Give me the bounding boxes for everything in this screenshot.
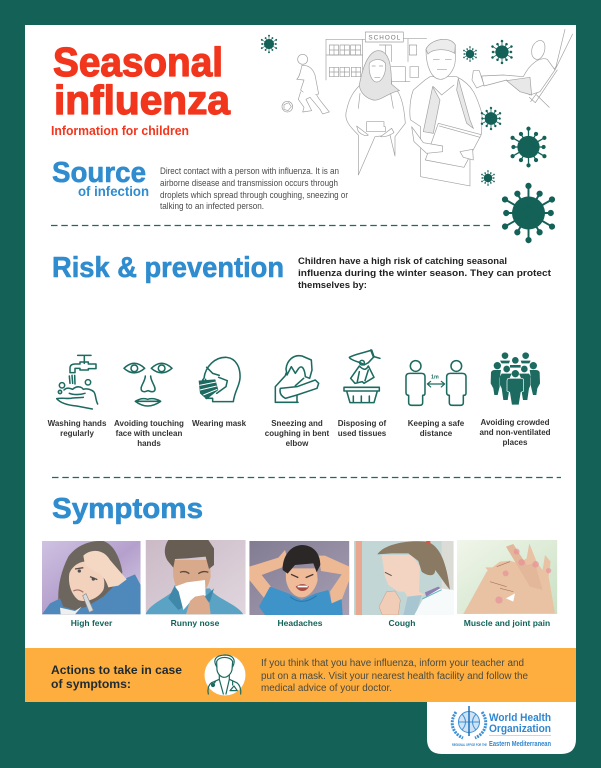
heading: symptoms: Symptoms	[52, 493, 203, 525]
icon labels: Washing hands	[48, 419, 107, 428]
action text: put on a mask. Visit your nearest health facility and follow the	[261, 671, 528, 682]
action heading: of symptoms:	[51, 677, 131, 691]
WHO wordmark: REGIONAL OFFICE FOR THE	[452, 743, 487, 747]
WHO wordmark: Eastern Mediterranean	[489, 741, 551, 748]
symptom captions	[71, 618, 550, 628]
icon: girl with hijab	[346, 51, 405, 175]
subtitle: Information for children	[51, 123, 189, 138]
icon: running boy with ball	[282, 54, 329, 114]
title	[53, 39, 231, 123]
photo: headaches	[249, 541, 349, 615]
icon: keeping a safe distance: 1m	[431, 375, 439, 381]
school building: SCHOOL	[368, 34, 401, 41]
symptom captions: Runny nose	[171, 618, 220, 628]
icon labels: Disposing of	[338, 419, 387, 428]
icon labels: distance	[420, 429, 453, 438]
title: influenza	[54, 77, 231, 123]
heading: risk and prevention: Risk & prevention	[52, 252, 284, 284]
icon labels: Keeping a safe	[408, 419, 465, 428]
WHO emblem	[452, 706, 486, 738]
icon labels: Avoiding crowded	[480, 418, 550, 427]
heading: source of infection: Source	[52, 157, 146, 189]
symptom captions: Muscle and joint pain	[464, 618, 550, 628]
WHO wordmark	[452, 712, 551, 748]
action band	[25, 648, 576, 702]
photo: cough	[354, 541, 454, 615]
symptom captions: Headaches	[278, 618, 323, 628]
title: Seasonal	[53, 39, 223, 85]
icon: face	[124, 363, 172, 406]
icon labels: regularly	[60, 429, 94, 438]
icon: crowd	[491, 352, 540, 405]
source description: airborne disease and transmission occurs through	[160, 178, 338, 188]
icon labels: coughing in bent	[265, 429, 330, 438]
illustration: children and school	[282, 29, 573, 186]
icon labels: used tissues	[338, 429, 387, 438]
WHO logo panel	[427, 702, 576, 754]
icon labels: Sneezing and	[271, 419, 323, 428]
icon: doctor	[204, 654, 246, 696]
action heading: Actions to take in case	[51, 663, 182, 677]
icon: boy with folder	[410, 39, 482, 186]
white content panel	[25, 25, 576, 648]
photo: runny nose	[146, 540, 246, 614]
virus particles	[257, 32, 568, 251]
symptom captions: Cough	[389, 618, 415, 628]
icon labels: elbow	[286, 439, 309, 448]
source description: Direct contact with a person with influenza. It is an	[160, 166, 339, 176]
school building	[326, 32, 427, 82]
icon: sneezing in elbow	[275, 356, 319, 402]
icon: keeping a safe distance	[406, 361, 466, 405]
photo: muscle and joint pain	[457, 540, 557, 614]
action heading	[51, 663, 182, 691]
photo: high fever	[42, 541, 141, 614]
icon labels: and non-ventilated	[479, 428, 551, 437]
action text	[261, 658, 528, 694]
icon labels	[48, 418, 551, 448]
action text: If you think that you have influenza, inform your teacher and	[261, 658, 524, 669]
WHO wordmark: Organization	[489, 723, 551, 735]
icon labels: Wearing mask	[192, 419, 247, 428]
WHO wordmark: World Health	[489, 712, 551, 724]
icon: wearing mask	[199, 357, 240, 402]
icon: disposing of tissues	[344, 350, 380, 403]
icon labels: face with unclean	[116, 429, 182, 438]
icon labels: Avoiding touching	[114, 419, 184, 428]
source description: droplets which spread through coughing, sneezing or	[160, 190, 348, 200]
icon labels: places	[503, 438, 528, 447]
heading: source of infection: of infection	[78, 183, 149, 199]
risk intro text: Children have a high risk of catching seasonal	[298, 256, 507, 267]
source description	[160, 166, 348, 211]
action text: medical advice of your doctor.	[261, 683, 392, 694]
risk intro text: influenza during the winter season. They can protect	[298, 268, 552, 279]
icon: child on swing	[472, 29, 573, 107]
icon: washing hands	[57, 355, 98, 409]
icon labels: hands	[137, 439, 161, 448]
risk intro text	[298, 256, 552, 291]
risk intro text: themselves by:	[298, 280, 367, 291]
symptom captions: High fever	[71, 618, 113, 628]
source description: talking to an infected person.	[160, 201, 264, 211]
